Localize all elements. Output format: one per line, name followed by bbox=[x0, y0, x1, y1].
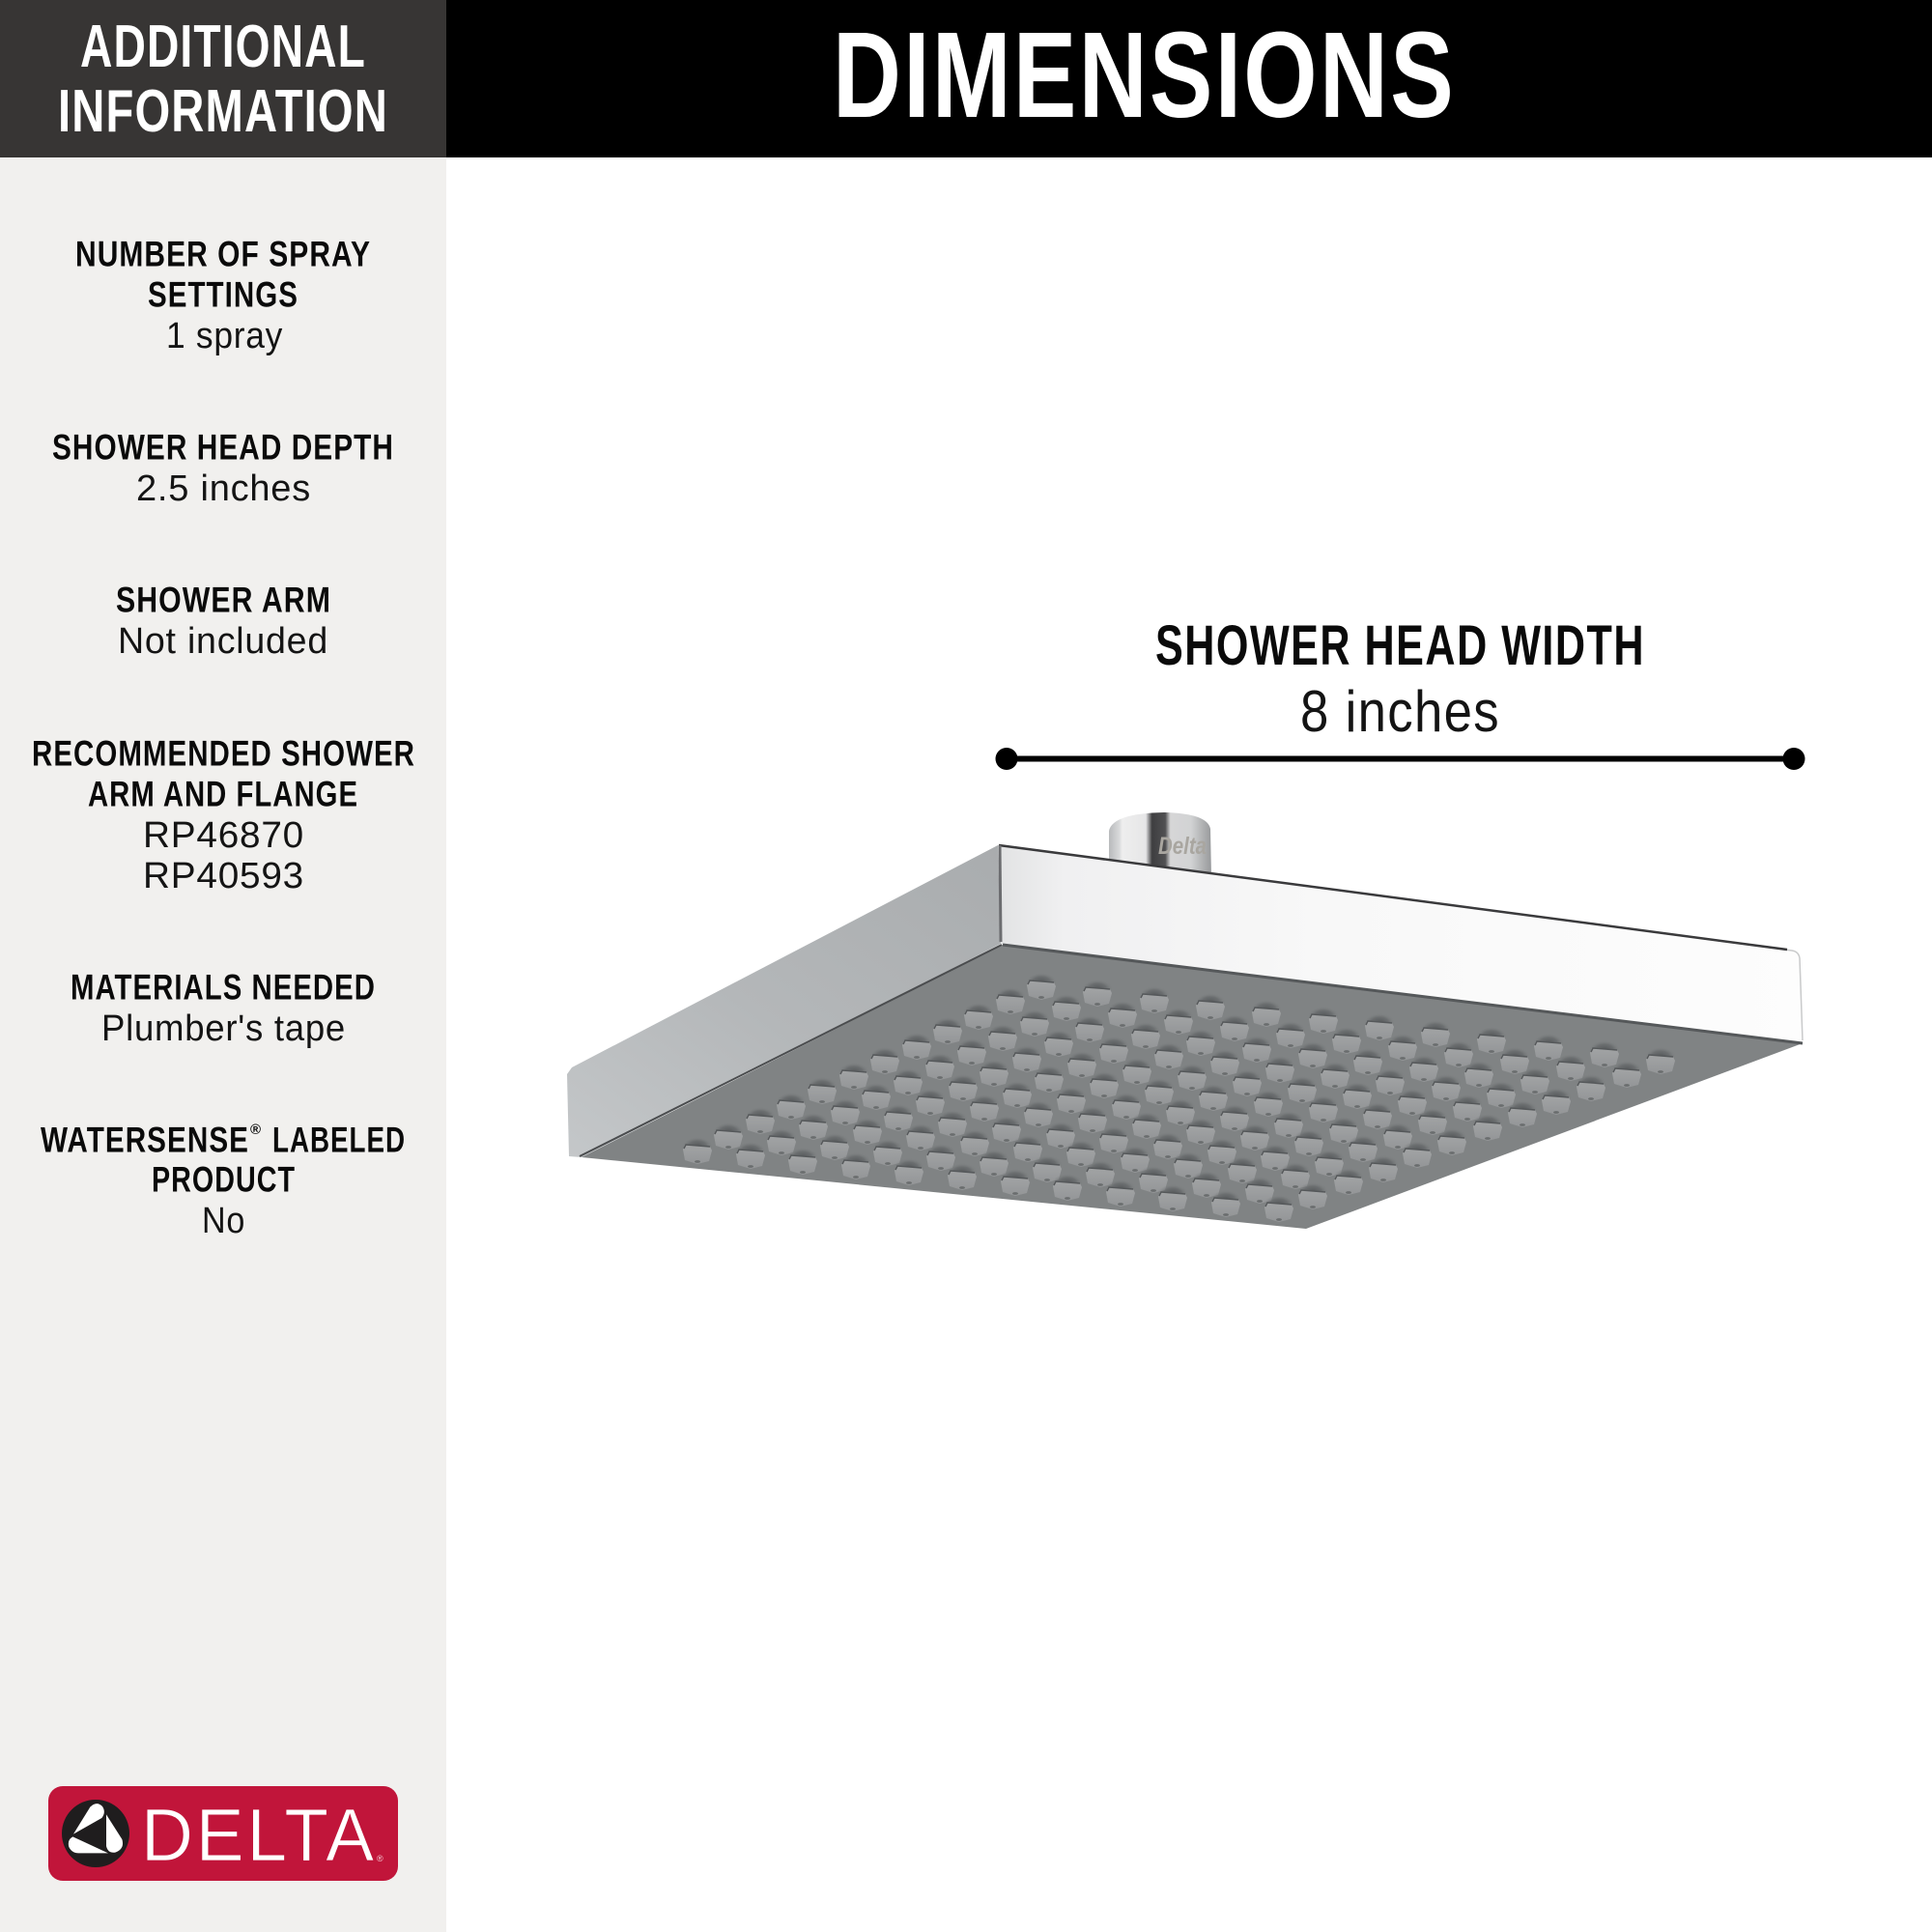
width label: 8 inches bbox=[1300, 679, 1500, 744]
spec: number of spray settings: 1 spray bbox=[166, 316, 283, 356]
front face bbox=[999, 845, 1803, 1041]
spec: watersense labeled product: LABELED bbox=[272, 1121, 406, 1159]
spec: shower head depth: 2.5 inches bbox=[136, 469, 311, 509]
sidebar header: ADDITIONAL bbox=[80, 14, 366, 80]
panel: additional information sidebar bbox=[0, 0, 446, 1932]
icon: Delta triangle mark bbox=[62, 1800, 129, 1867]
shower arm connector bbox=[1109, 812, 1211, 877]
shower arm connector: Delta bbox=[1158, 833, 1207, 860]
spec: number of spray settings: NUMBER OF SPRAY bbox=[75, 234, 371, 274]
spec: shower arm: SHOWER ARM bbox=[116, 580, 331, 620]
spec: shower head depth: SHOWER HEAD DEPTH bbox=[52, 427, 394, 468]
spec: materials needed: Plumber's tape bbox=[101, 1009, 346, 1049]
spray nozzles bbox=[682, 970, 1676, 1222]
sidebar header: INFORMATION bbox=[58, 78, 388, 145]
spec: watersense labeled product: No bbox=[202, 1201, 245, 1241]
Delta logo: ® bbox=[377, 1854, 384, 1863]
Delta logo: DELTA bbox=[141, 1794, 377, 1877]
spec: watersense labeled product: ® bbox=[250, 1122, 261, 1138]
spec: watersense labeled product: PRODUCT bbox=[152, 1159, 296, 1200]
title bar: DIMENSIONS bbox=[833, 7, 1456, 143]
spec: shower head depth bbox=[52, 427, 394, 509]
spec: recommended shower arm and flange: RP46870 bbox=[143, 815, 304, 856]
shower head illustration bbox=[567, 812, 1803, 1229]
spec: shower arm bbox=[116, 580, 331, 662]
spec: recommended shower arm and flange bbox=[32, 734, 415, 896]
title bar bbox=[446, 0, 1932, 157]
spec: number of spray settings: SETTINGS bbox=[148, 274, 298, 315]
sidebar header bbox=[0, 0, 446, 157]
underside spray face bbox=[580, 945, 1803, 1229]
spec: recommended shower arm and flange: ARM AND FLANGE bbox=[88, 775, 358, 813]
spec: materials needed bbox=[71, 968, 376, 1049]
Delta logo bbox=[48, 1786, 398, 1881]
spec: recommended shower arm and flange: RECOMMENDED SHOWER bbox=[32, 734, 415, 773]
dimension line with end dots bbox=[995, 748, 1804, 770]
spec: shower arm: Not included bbox=[118, 621, 328, 662]
left side face bbox=[567, 845, 1001, 1157]
spec: materials needed: MATERIALS NEEDED bbox=[71, 968, 376, 1007]
spec: recommended shower arm and flange: RP40593 bbox=[143, 856, 304, 896]
spec: watersense labeled product bbox=[41, 1121, 406, 1241]
width label: SHOWER HEAD WIDTH bbox=[1155, 614, 1645, 677]
spec: number of spray settings bbox=[75, 234, 371, 356]
width label bbox=[1155, 614, 1645, 744]
spec: watersense labeled product: WATERSENSE bbox=[41, 1121, 249, 1159]
